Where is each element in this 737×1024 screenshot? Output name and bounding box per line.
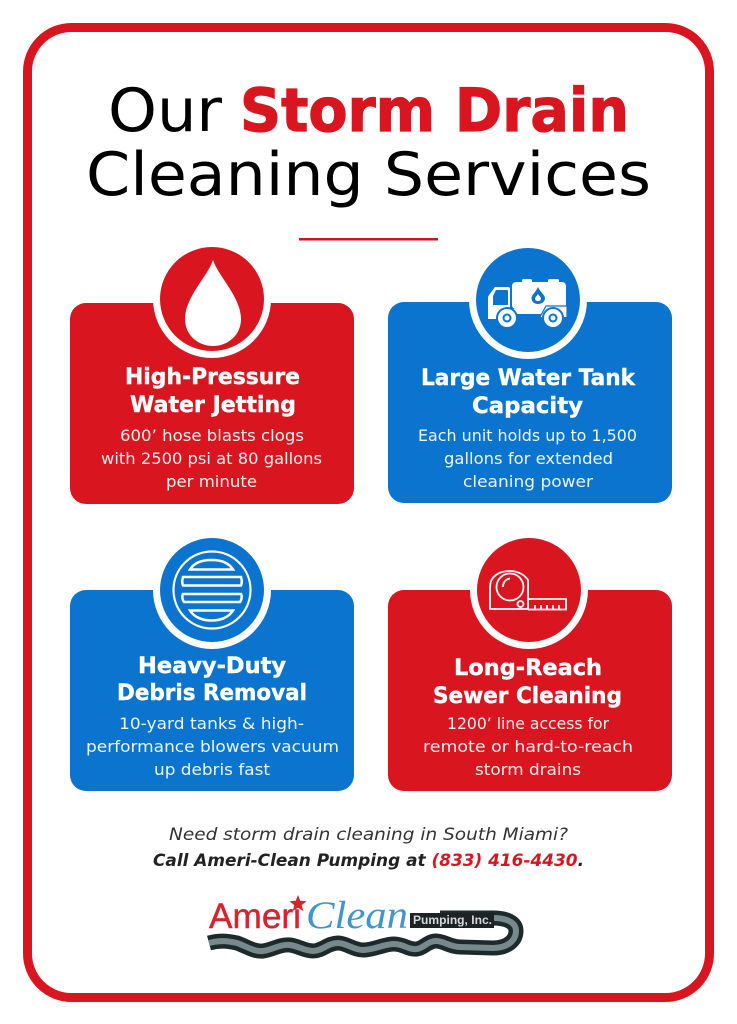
call to action: [153, 825, 584, 871]
text block: [86, 714, 339, 779]
logo wordmark: [209, 894, 494, 937]
text block: cleaning power: [463, 472, 593, 491]
heading: Large Water Tank: [421, 366, 636, 391]
logo wordmark: Ameri: [209, 897, 301, 936]
icon: drain grate: [153, 531, 271, 649]
logo wordmark: Pumping, Inc.: [413, 913, 492, 927]
text block: storm drains: [475, 760, 581, 779]
call to action: Need storm drain cleaning in South Miami?: [169, 825, 568, 845]
heading: Debris Removal: [117, 681, 307, 706]
heading: Water Jetting: [130, 393, 296, 418]
title: Storm Drain: [240, 76, 629, 146]
title: Our: [108, 76, 222, 146]
text block: 1200’ line access for: [447, 714, 609, 733]
icon: tape measure: [470, 531, 588, 649]
heading: [117, 654, 307, 706]
heading: Heavy-Duty: [138, 654, 286, 679]
text block: with 2500 psi at 80 gallons: [101, 449, 322, 468]
call to action: Call Ameri-Clean Pumping at (833) 416-4430.: [153, 851, 584, 871]
title: [86, 76, 651, 210]
heading: Long-Reach: [454, 656, 602, 681]
logo hose: [209, 918, 516, 951]
heading: Capacity: [472, 394, 583, 419]
panel: large water tank capacity: [388, 241, 672, 503]
panel: high-pressure water jetting: [70, 240, 354, 504]
text block: [423, 714, 633, 779]
heading: [421, 366, 636, 419]
text block: performance blowers vacuum: [86, 737, 339, 756]
heading: Sewer Cleaning: [433, 684, 622, 709]
icon: water drop: [153, 240, 271, 358]
title: Cleaning Services: [86, 140, 651, 210]
text block: up debris fast: [154, 760, 270, 779]
text block: [418, 426, 637, 491]
text block: 600’ hose blasts clogs: [120, 426, 304, 445]
logo: Ameri-Clean Pumping: [209, 894, 516, 951]
text block: Each unit holds up to 1,500: [418, 426, 637, 445]
panel: long-reach sewer cleaning: [388, 531, 672, 791]
text block: per minute: [166, 472, 257, 491]
text block: 10-yard tanks & high-: [119, 714, 304, 733]
text block: [101, 426, 322, 491]
panel: heavy-duty debris removal: [70, 531, 354, 791]
heading: High-Pressure: [125, 365, 300, 390]
icon: water truck: [469, 241, 587, 359]
heading: [125, 365, 300, 418]
logo wordmark: Clean: [306, 894, 408, 937]
text block: remote or hard-to-reach: [423, 737, 633, 756]
heading: [433, 656, 622, 709]
text block: gallons for extended: [444, 449, 613, 468]
